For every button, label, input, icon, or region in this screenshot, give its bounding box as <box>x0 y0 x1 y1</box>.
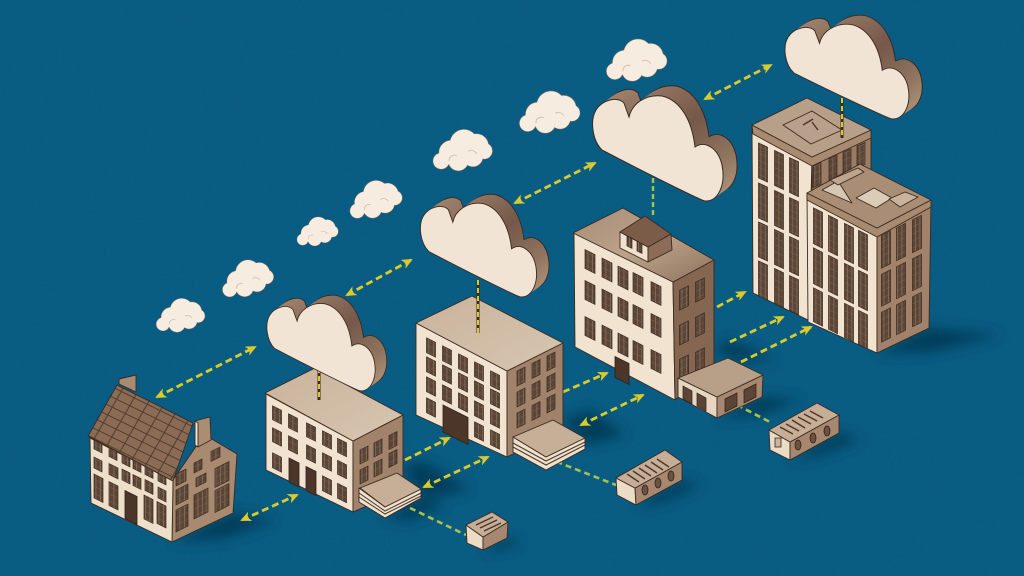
annex 2 base <box>513 437 585 470</box>
tower front left windows <box>814 208 868 349</box>
house front wall <box>90 438 173 542</box>
vertical link cloud 4 <box>840 98 844 138</box>
vertical link cloud 3 <box>652 178 654 216</box>
annex 1 roof <box>360 473 421 507</box>
box 1 vents <box>476 517 501 531</box>
small cloud 5 <box>429 126 494 174</box>
tower front <box>807 164 931 353</box>
building 2 right wall <box>507 343 563 457</box>
connector: annex 3 to box 3 <box>737 405 770 422</box>
box 3 top <box>769 403 839 442</box>
box 2 left face <box>616 478 636 505</box>
house front windows <box>94 440 166 539</box>
building 2 left wall <box>416 323 507 457</box>
arrow: cloud 1 to cloud 2 <box>347 260 411 295</box>
box 2 vents <box>627 459 669 482</box>
arrow: cloud 3 to cloud 4 <box>705 65 771 99</box>
building 1 <box>265 368 421 518</box>
tower front left wall <box>807 193 877 353</box>
box 2 <box>616 450 682 505</box>
tower back roof <box>752 98 871 157</box>
arrow: annex 1 to building 2 <box>424 457 488 487</box>
tower back roof unit marks <box>803 119 818 130</box>
building 2 roof <box>416 296 563 371</box>
box 3 door <box>775 438 781 447</box>
cloud 1 <box>267 295 387 391</box>
building 3 right wall <box>673 260 714 400</box>
arrow: house to cloud 1 <box>157 347 255 397</box>
house chimney right <box>195 417 211 447</box>
annex 1 <box>359 473 421 518</box>
annex 1 base <box>359 488 421 518</box>
arrow: annex 3 to tower <box>741 327 811 362</box>
curved roof vent <box>889 192 918 207</box>
cloud 2 extrusion <box>422 194 549 296</box>
annex 2 stripes <box>513 442 585 465</box>
cloud 1 face <box>267 303 375 391</box>
box 3 right face <box>790 415 839 460</box>
building 2 <box>416 296 585 470</box>
tower front roof units <box>822 168 918 208</box>
ground shadows <box>172 328 1000 550</box>
box 2 top <box>616 450 682 488</box>
arrow: annex 2 to building 3 <box>581 395 643 425</box>
tower back left wall <box>752 125 812 320</box>
cloud 3 <box>593 86 737 201</box>
building 1 right windows <box>360 432 397 484</box>
annex 3 garage doors <box>683 384 756 412</box>
small cloud 1 <box>153 296 207 335</box>
arrow: cloud 2 to cloud 3 <box>515 163 595 203</box>
annex 1 stripes <box>359 493 421 514</box>
box 1 <box>466 512 508 550</box>
building 3 left windows <box>585 248 661 400</box>
cloud 4 face <box>785 24 909 119</box>
vertical link cloud 1 <box>318 368 320 400</box>
cloud 2 face <box>420 203 537 297</box>
house chimney left <box>119 375 136 392</box>
tower back cornice <box>752 125 871 166</box>
connector: annex 2 to box 2 <box>547 458 616 485</box>
house roof <box>88 385 193 481</box>
annex 3 roof <box>678 358 763 397</box>
box 3 <box>769 403 839 460</box>
tower front cornice <box>807 193 931 237</box>
building 2 left windows <box>426 338 500 460</box>
building 1 roof <box>265 368 403 441</box>
box 3 vents <box>780 411 823 434</box>
box 1 top <box>466 512 508 537</box>
tower back <box>752 98 871 320</box>
building 3 right windows <box>680 278 704 380</box>
arrow: building 3 lower to tower <box>730 317 783 342</box>
dormer windows <box>627 236 642 254</box>
connector: annex 1 to box 1 <box>410 508 466 535</box>
dormer right face <box>648 234 672 262</box>
box 2 portholes <box>642 471 674 495</box>
tower back right windows <box>813 142 865 188</box>
dormer roof <box>620 216 671 247</box>
dormer left face <box>620 232 648 262</box>
arrow: building 3 to tower <box>717 292 745 307</box>
cloud 4 extrusion <box>787 15 922 118</box>
dormer <box>620 216 672 262</box>
box 2 right face <box>635 462 682 505</box>
parapet ridge <box>830 168 864 185</box>
small cloud 7 <box>603 36 669 84</box>
cloud 4 <box>785 15 922 119</box>
box 3 portholes <box>795 426 830 450</box>
small cloud 6 <box>516 88 582 136</box>
cloud 2 <box>420 194 549 297</box>
vertical link cloud 2 <box>476 280 480 333</box>
house chimney light face <box>195 421 198 447</box>
box 1 right face <box>483 522 508 550</box>
cloud 3 extrusion <box>595 86 737 200</box>
roof unit <box>856 188 892 208</box>
tower front right wall <box>877 200 931 353</box>
tower back left windows <box>758 143 798 315</box>
arrow: building 2 to building 3 <box>563 373 607 392</box>
box 1 left face <box>466 525 483 550</box>
building 1 left windows <box>272 406 346 511</box>
tower front roof <box>807 164 931 228</box>
small cloud 3 <box>294 214 340 249</box>
building 1 right wall <box>353 415 403 512</box>
annex 3 right wall <box>717 375 763 418</box>
building 3 <box>573 208 763 418</box>
arrow: building 1 to building 2 <box>405 438 449 460</box>
tower back right wall <box>812 130 871 200</box>
small cloud 2 <box>217 255 277 302</box>
cloud 3 face <box>593 96 723 201</box>
tower back roof unit <box>783 111 842 144</box>
arrow: house to building 1 <box>242 495 297 520</box>
tower front right windows <box>882 215 922 342</box>
box 3 left face <box>769 430 790 460</box>
cloud 1 extrusion <box>269 295 387 390</box>
building 1 left wall <box>266 394 353 512</box>
house right windows <box>176 442 229 532</box>
annex 2 <box>513 420 585 470</box>
small cloud 4 <box>344 175 405 223</box>
small clouds row <box>153 36 669 335</box>
house <box>88 375 237 542</box>
annex 2 roof <box>513 420 585 457</box>
annex 3 <box>678 358 763 418</box>
building 2 right windows <box>517 352 555 428</box>
annex 3 left wall <box>678 378 717 418</box>
building 3 left wall <box>574 233 675 400</box>
building 3 roof <box>573 208 714 282</box>
skylight <box>822 181 852 203</box>
house right gable wall <box>172 438 237 542</box>
